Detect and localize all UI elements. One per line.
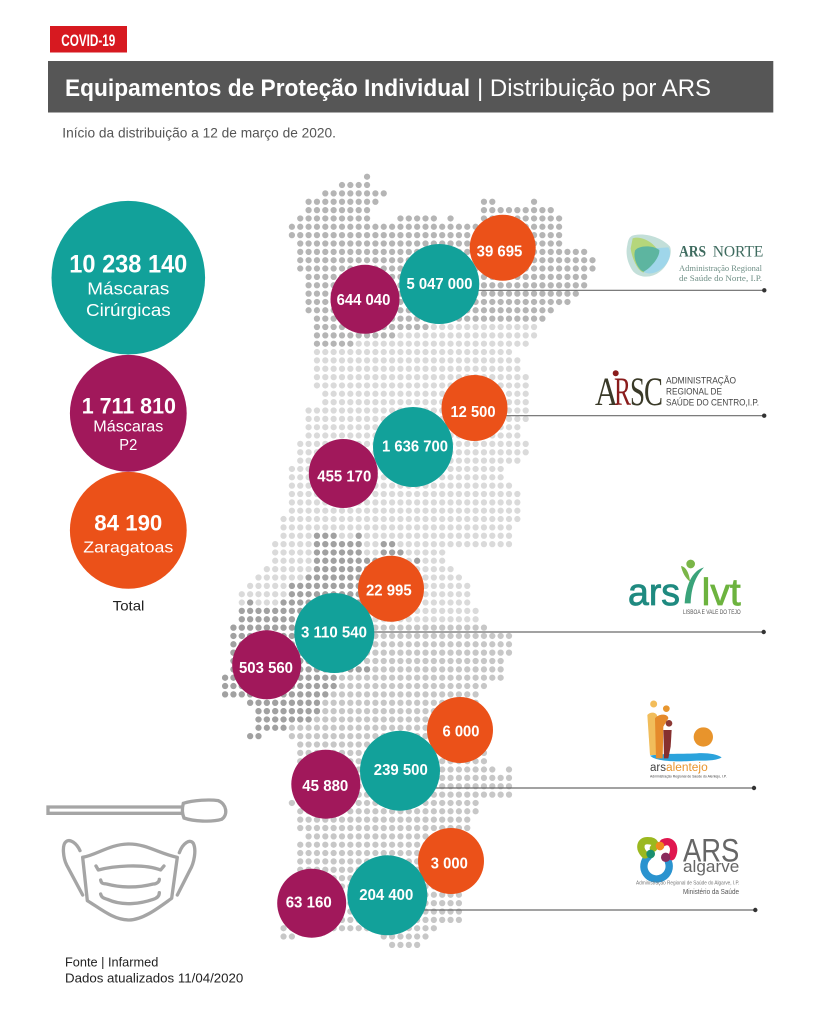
region: Norte values: 644 040 [337, 292, 390, 309]
leader lines [334, 288, 766, 912]
subtitle: Início da distribuição a 12 de março de 2020. [62, 124, 336, 140]
region: Algarve values [277, 828, 484, 938]
logo: ARS Algarve: Ministério da Saúde [683, 889, 739, 896]
title bar: Equipamentos de Proteção Individual [65, 75, 470, 102]
source note [65, 956, 243, 985]
region: Centro values: 12 500 [450, 404, 496, 421]
total: surgical masks: 10 238 140 [69, 251, 187, 279]
icon: face mask [63, 841, 195, 920]
title bar: | Distribuição por ARS [477, 75, 711, 102]
logo: ARS Norte: Administração Regional [679, 263, 763, 273]
tag: COVID-19 [50, 26, 127, 52]
source note: Fonte | Infarmed [65, 956, 158, 970]
title bar [48, 61, 773, 112]
logo: ARS Alentejo [647, 700, 727, 778]
total: P2 masks: Máscaras [93, 419, 164, 436]
logo: ARS Centro: SAÚDE DO CENTRO,I.P. [666, 398, 759, 408]
total: P2 masks: 1 711 810 [82, 393, 176, 418]
logo: ARS LVT [628, 560, 741, 616]
region: LVT values: 22 995 [366, 582, 412, 600]
region: Alentejo values [291, 697, 493, 819]
logo: ARS Centro: S [630, 369, 645, 414]
region: Norte values: 39 695 [477, 244, 522, 260]
total: P2 masks: P2 [119, 437, 137, 454]
logo: ARS LVT: lvt [702, 572, 741, 614]
region: Algarve values: 63 160 [286, 894, 332, 912]
region: Algarve values: 3 000 [431, 856, 468, 872]
logo: ARS Algarve: ARS [683, 833, 739, 869]
logo: ARS Algarve [636, 833, 740, 896]
logo: ARS Alentejo: alentejo [666, 762, 708, 774]
logo: ARS Centro: ADMINISTRAÇÃO [666, 376, 736, 386]
dot map of Portugal [225, 177, 593, 945]
logo: ARS LVT: LISBOA E VALE DO TEJO [683, 609, 741, 616]
logo: ARS Centro: A [595, 369, 618, 414]
total: surgical masks: Cirúrgicas [86, 300, 171, 320]
logo: ARS Centro: REGIONAL DE [666, 386, 722, 398]
region: LVT values: 3 110 540 [301, 624, 367, 642]
logo: ARS Norte: ARS [679, 244, 706, 261]
region: Centro values: 1 636 700 [382, 438, 448, 456]
icon: swab [48, 800, 226, 821]
tag: COVID-19: COVID-19 [61, 31, 115, 50]
region: Alentejo values: 6 000 [442, 724, 480, 740]
total: swabs: Zaragatoas [83, 539, 173, 556]
region: Alentejo values: 45 880 [302, 778, 348, 795]
logo: ARS Centro [595, 369, 759, 414]
region: LVT values [232, 556, 424, 699]
logo: ARS Centro: R [614, 369, 631, 414]
logo: ARS Norte [627, 234, 763, 283]
region: Algarve values: 204 400 [359, 887, 413, 904]
logo: ARS Centro: C [644, 369, 663, 414]
region: Norte values: 5 047 000 [406, 276, 473, 293]
logo: ARS LVT: ars [628, 572, 680, 614]
logo: ARS Alentejo: ars [650, 762, 666, 774]
source note: Dados atualizados 11/04/2020 [65, 971, 243, 985]
logo: ARS Algarve: algarve [683, 857, 739, 876]
total label: Total [113, 598, 144, 614]
total: surgical masks [52, 201, 205, 354]
logo: ARS Alentejo: Administração Regional de Saúde do Alentejo, I.P. [650, 774, 727, 778]
region: LVT values: 503 560 [239, 660, 293, 677]
region: Centro values [309, 375, 508, 508]
total: swabs [70, 472, 187, 589]
total: P2 masks [70, 355, 187, 472]
total: surgical masks: Máscaras [87, 278, 170, 298]
logo: ARS Norte: de Saúde do Norte, I.P. [679, 273, 762, 283]
total: swabs: 84 190 [94, 511, 162, 536]
region: Norte values [330, 215, 536, 334]
logo: ARS Algarve: Administração Regional de Saúde do Algarve, I.P. [636, 880, 740, 886]
logo: ARS Norte: NORTE [713, 244, 763, 261]
region: Centro values: 455 170 [317, 468, 371, 486]
region: Alentejo values: 239 500 [374, 762, 428, 779]
